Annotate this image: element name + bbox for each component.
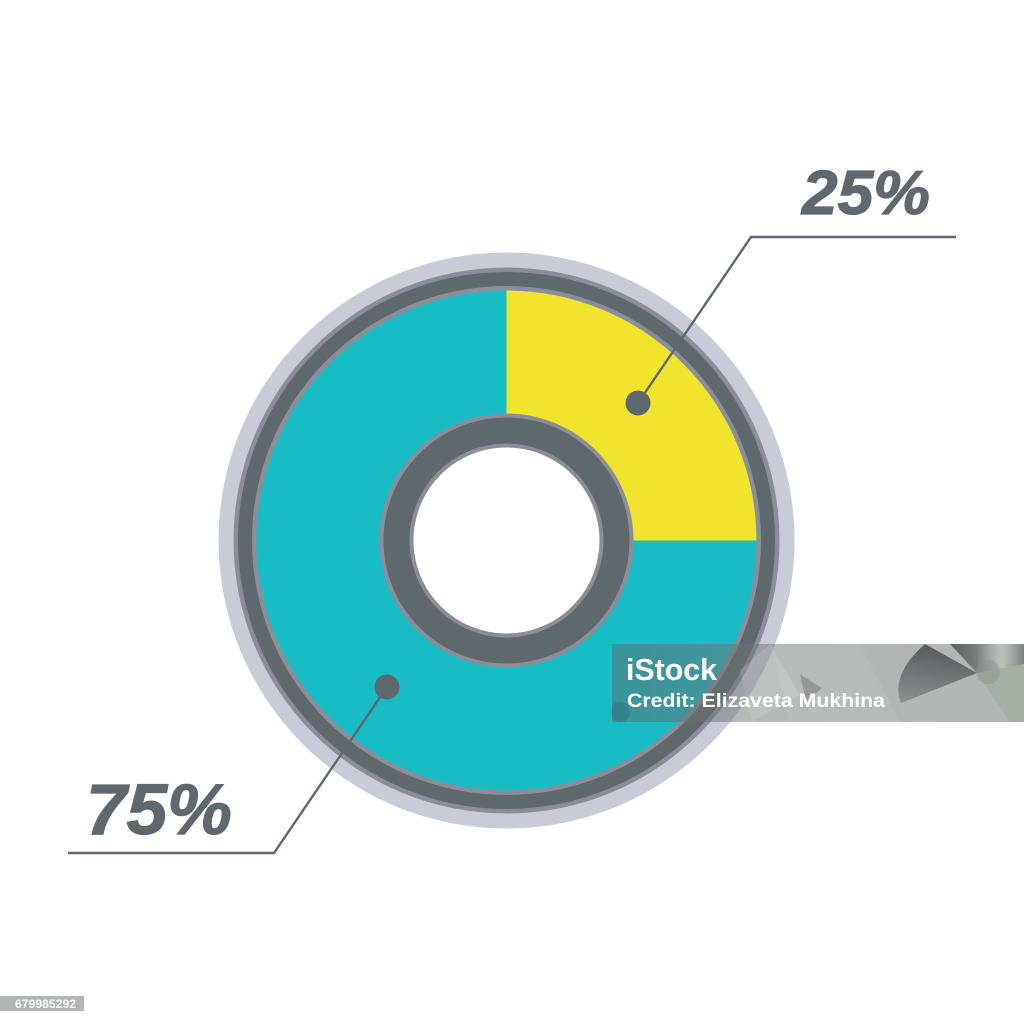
inner grey ring [380,414,634,668]
watermark band [610,644,1024,722]
marker dot [374,674,400,700]
marker dot [626,390,650,416]
label: 75% [86,771,232,850]
outer pale ring [218,252,794,828]
image id tag [0,996,84,1011]
centre hole [414,448,600,634]
watermark logo: iStock [626,652,718,687]
label: 25% [801,159,930,228]
donut chart [218,252,794,828]
callout: 25% [626,159,956,416]
outer grey ring [234,268,780,814]
image id tag: 679985292 [15,999,76,1011]
segment: 75% teal [256,290,756,790]
segment: 25% yellow [506,290,756,540]
watermark credit: Credit: Elizaveta Mukhina [627,690,885,712]
leader line [68,687,387,853]
leader line [638,237,956,403]
callout: 75% [68,674,400,853]
